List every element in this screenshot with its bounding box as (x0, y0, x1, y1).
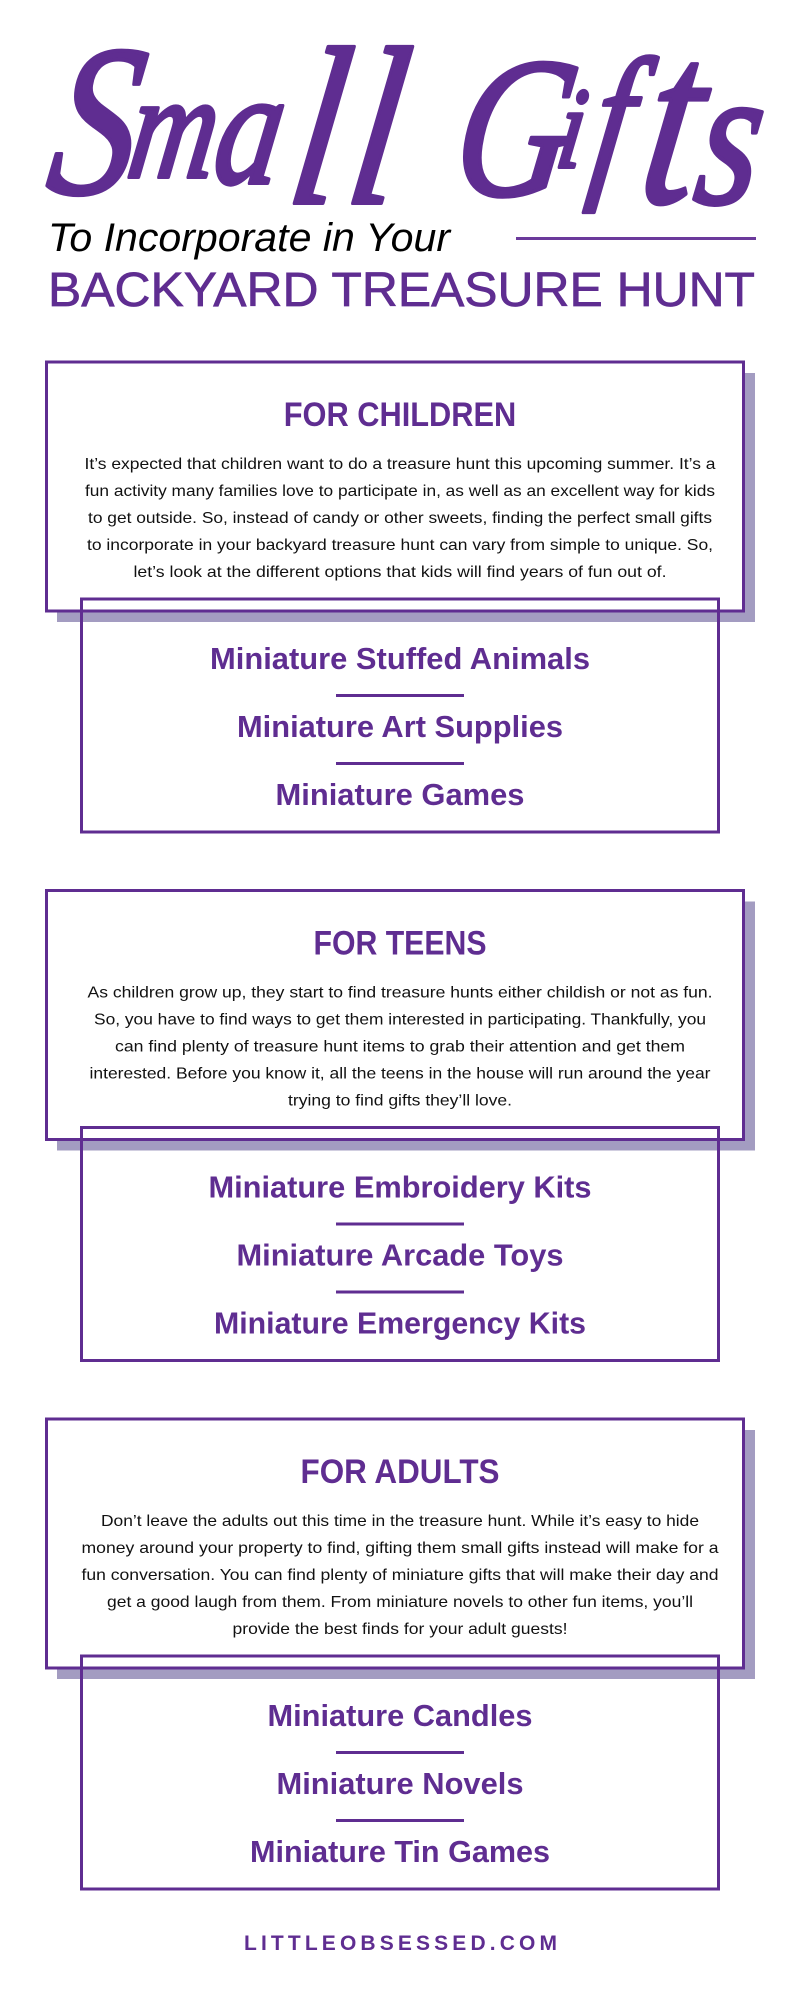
title: Small Gifts: m (120, 43, 231, 210)
body text: to get outside. So, instead of candy or other sweets, finding the perfect small gifts (88, 510, 712, 527)
title: Small Gifts: S (37, 2, 158, 240)
body text: So, you have to find ways to get them interested in participating. Thankfully, you (94, 1012, 706, 1028)
gift: miniature candles: Miniature Candles (268, 1698, 532, 1733)
panel: intro (46, 1419, 744, 1668)
title: Small Gifts: i (550, 65, 595, 192)
panel shadow (57, 902, 755, 1150)
body text: can find plenty of treasure hunt items to grab their attention and get them (115, 1038, 685, 1056)
section: for teens (46, 890, 755, 1360)
heading: for children: FOR CHILDREN (284, 396, 516, 434)
panel shadow (57, 1430, 755, 1679)
panel: intro (46, 890, 744, 1140)
body text: get a good laugh from them. From miniature novels to other fun items, you’ll (107, 1594, 693, 1611)
body text: fun activity many families love to participate in, as well as an excellent way for kids (85, 483, 715, 500)
panel: gift list (82, 599, 718, 832)
title rule (516, 237, 756, 240)
body text (88, 984, 712, 1110)
title: Small Gifts: l (336, 3, 423, 252)
gift: miniature art supplies: Miniature Art Supplies (237, 709, 563, 744)
gift: miniature stuffed animals: Miniature Stuffed Animals (210, 641, 590, 676)
footer: website: LITTLEOBSESSED.COM (244, 1932, 557, 1955)
body text: let’s look at the different options that kids will find years of fun out of. (134, 564, 666, 581)
gift: miniature emergency kits: Miniature Emergency Kits (214, 1306, 586, 1340)
title: Small Gifts: a (205, 36, 298, 219)
gift: miniature novels: Miniature Novels (276, 1766, 524, 1801)
heading: for teens: FOR TEENS (314, 924, 486, 962)
body text: It’s expected that children want to do a treasure hunt this upcoming summer. It’s a (84, 456, 716, 473)
title: Small Gifts: f (582, 25, 663, 213)
title: Small Gifts: G (443, 18, 591, 239)
subtitle: Backyard Treasure Hunt: BACKYARD TREASURE HUNT (48, 264, 755, 317)
gift: miniature arcade toys: Miniature Arcade Toys (236, 1238, 564, 1272)
body text: Don’t leave the adults out this time in the treasure hunt. While it’s easy to hide (101, 1513, 699, 1530)
body text: interested. Before you know it, all the teens in the house will run around the year (90, 1066, 711, 1082)
body text: As children grow up, they start to find treasure hunts either childish or not as fun. (88, 984, 712, 1002)
title block (34, 0, 786, 317)
subtitle: To Incorporate in Your: To Incorporate in Your (48, 216, 452, 260)
body text: trying to find gifts they’ll love. (288, 1092, 512, 1110)
title: Small Gifts: s (685, 26, 780, 247)
panel shadow (57, 373, 755, 622)
gift: miniature games: Miniature Games (276, 777, 524, 812)
body text (82, 1513, 719, 1638)
section: for children (46, 362, 755, 832)
heading: for adults: FOR ADULTS (300, 1453, 500, 1491)
panel: intro (46, 362, 744, 611)
body text (84, 456, 716, 581)
body text: provide the best finds for your adult guests! (232, 1621, 568, 1638)
gift: miniature tin games: Miniature Tin Games (250, 1834, 550, 1869)
gift: miniature embroidery kits: Miniature Embroidery Kits (208, 1170, 592, 1204)
body text: money around your property to find, gifting them small gifts instead will make for a (82, 1540, 719, 1557)
title: Small Gifts: l (277, 3, 365, 252)
section: for adults (46, 1419, 755, 1889)
body text: fun conversation. You can find plenty of miniature gifts that will make their day and (82, 1567, 718, 1584)
panel: gift list (82, 1128, 718, 1360)
panel: gift list (82, 1656, 718, 1889)
body text: to incorporate in your backyard treasure hunt can vary from simple to unique. So, (87, 537, 713, 554)
